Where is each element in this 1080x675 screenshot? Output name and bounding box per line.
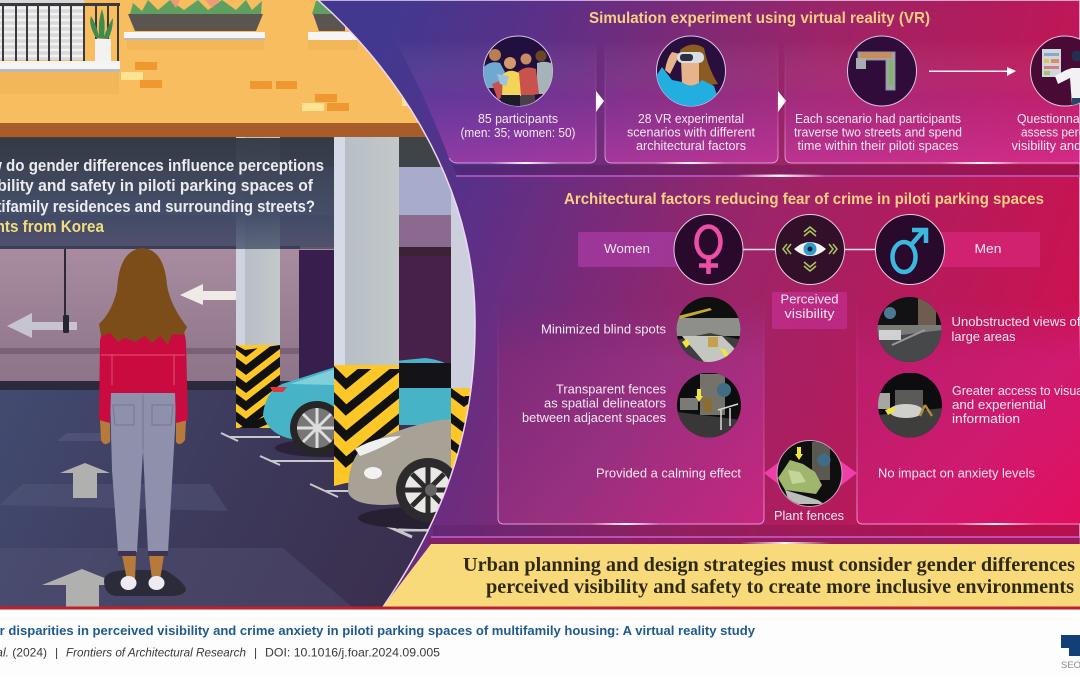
pillar three <box>451 192 474 468</box>
wall bricks <box>121 62 414 111</box>
text: unobstructed views: large areas <box>952 329 1016 344</box>
step text one <box>460 111 576 140</box>
footer citation: Frontiers of Architectural Research <box>66 646 246 660</box>
ceiling and back wall <box>0 137 480 390</box>
label: perceived visibility: visibility <box>784 306 835 321</box>
shadow <box>104 570 186 596</box>
arrow to questionnaire <box>929 67 1016 76</box>
photo: unobstructed views <box>877 297 943 363</box>
panel: men factors <box>857 297 1080 525</box>
illustration: piloti parking scene <box>0 0 482 607</box>
legs and shoes <box>120 555 164 590</box>
jacket seams <box>101 355 185 385</box>
parking floor <box>0 390 480 607</box>
label box: women <box>578 232 678 267</box>
panel: scenario procedure <box>785 40 1080 163</box>
text: unobstructed views <box>952 314 1080 344</box>
footer citation: DOI: 10.1016/j.foar.2024.09.005 <box>265 646 440 660</box>
jeans <box>110 393 176 552</box>
text: transparent fences: between adjacent spaces <box>522 410 666 425</box>
logo: university <box>1061 635 1080 671</box>
direction arrow right sign <box>180 284 236 305</box>
icon: participants group <box>483 36 553 110</box>
step text four <box>1012 111 1080 153</box>
step text two: scenarios with different <box>627 124 755 140</box>
footer citation: | <box>254 646 257 660</box>
photo: transparent fences <box>677 373 742 438</box>
icon: male symbol <box>876 214 944 284</box>
hair <box>99 248 187 345</box>
connector lines <box>742 248 876 250</box>
text: greater access: information <box>952 411 1020 426</box>
jean cuffs <box>118 551 168 556</box>
question overlay panel <box>0 138 334 249</box>
text: greater access <box>952 383 1080 426</box>
hands <box>100 420 186 444</box>
step text one: 85 participants <box>478 111 558 126</box>
woman figure <box>99 248 188 596</box>
conclusion text: Urban planning and design strategies must consider gender differences <box>463 554 1075 576</box>
conclusion text: perceived visibility and safety to create more inclusive environments <box>486 576 1074 598</box>
step text three <box>794 111 962 153</box>
photo: plant fences <box>777 440 842 506</box>
text: no impact: No impact on anxiety levels <box>878 466 1035 480</box>
icon: female symbol <box>674 214 743 284</box>
jacket <box>99 318 188 423</box>
panel: VR scenarios <box>605 40 778 163</box>
conclusion text <box>463 554 1075 598</box>
floor arrows <box>42 463 122 607</box>
footer citation: | <box>55 646 58 660</box>
band between sections <box>452 165 1080 177</box>
label box: men <box>940 232 1040 267</box>
step text two <box>627 111 755 153</box>
question text <box>0 156 324 236</box>
building wall <box>0 0 480 124</box>
heading: simulation experiment: Simulation experiment using virtual reality (VR) <box>589 10 930 27</box>
pillar one <box>236 137 280 428</box>
icon: street map <box>848 36 916 106</box>
label: perceived visibility: Perceived <box>780 292 838 306</box>
conclusion banner <box>383 544 1080 607</box>
footer citation <box>0 646 440 660</box>
teal car <box>263 358 460 457</box>
text: transparent fences: as spatial delineators <box>544 396 666 410</box>
chevrons between steps <box>596 91 786 112</box>
panel: sample participants <box>395 40 596 163</box>
jeans pockets <box>113 395 173 450</box>
step text two: architectural factors <box>636 138 746 153</box>
step text three: Each scenario had participants <box>795 111 961 126</box>
dark columns in back <box>299 250 451 385</box>
direction arrow left sign <box>7 313 77 338</box>
text: transparent fences <box>522 382 666 425</box>
label box: men: Men <box>974 241 1002 256</box>
step text three: traverse two streets and spend <box>794 124 962 140</box>
ceiling beam <box>0 123 480 137</box>
footer <box>0 606 1080 675</box>
photo: greater access <box>878 373 943 438</box>
diamonds pointing to panels <box>764 460 857 487</box>
panel: women factors <box>498 297 764 525</box>
silver car <box>348 418 482 529</box>
icon: questionnaire <box>1030 36 1080 108</box>
second planter box <box>308 0 358 50</box>
photo: minimized blind spots <box>676 297 742 363</box>
step text two: 28 VR experimental <box>638 111 744 126</box>
icon: visibility eye <box>776 214 844 284</box>
pillar two <box>334 137 399 486</box>
label box: women: Women <box>604 241 650 256</box>
step text three: time within their piloti spaces <box>798 138 959 153</box>
heading: architectural factors: Architectural factors reducing fear of crime in piloti parking spaces <box>564 191 1044 208</box>
white curved edge and purple panel background <box>318 0 1080 607</box>
parking lines <box>221 433 432 537</box>
icon: woman wearing VR headset <box>655 36 726 110</box>
text: greater access: and experiential <box>952 397 1046 412</box>
label: perceived visibility <box>772 292 847 329</box>
band above conclusion <box>428 525 1080 544</box>
text: plant fences: Plant fences <box>774 508 844 523</box>
step text one: (men: 35; women: 50) <box>460 125 576 140</box>
text: transparent fences: Transparent fences <box>556 382 666 396</box>
planter box <box>124 0 265 50</box>
text: unobstructed views: Unobstructed views of <box>952 314 1080 329</box>
text: calming effect: Provided a calming effect <box>596 466 741 480</box>
balcony <box>0 0 120 94</box>
text: minimized blind spots: Minimized blind spots <box>541 322 666 336</box>
